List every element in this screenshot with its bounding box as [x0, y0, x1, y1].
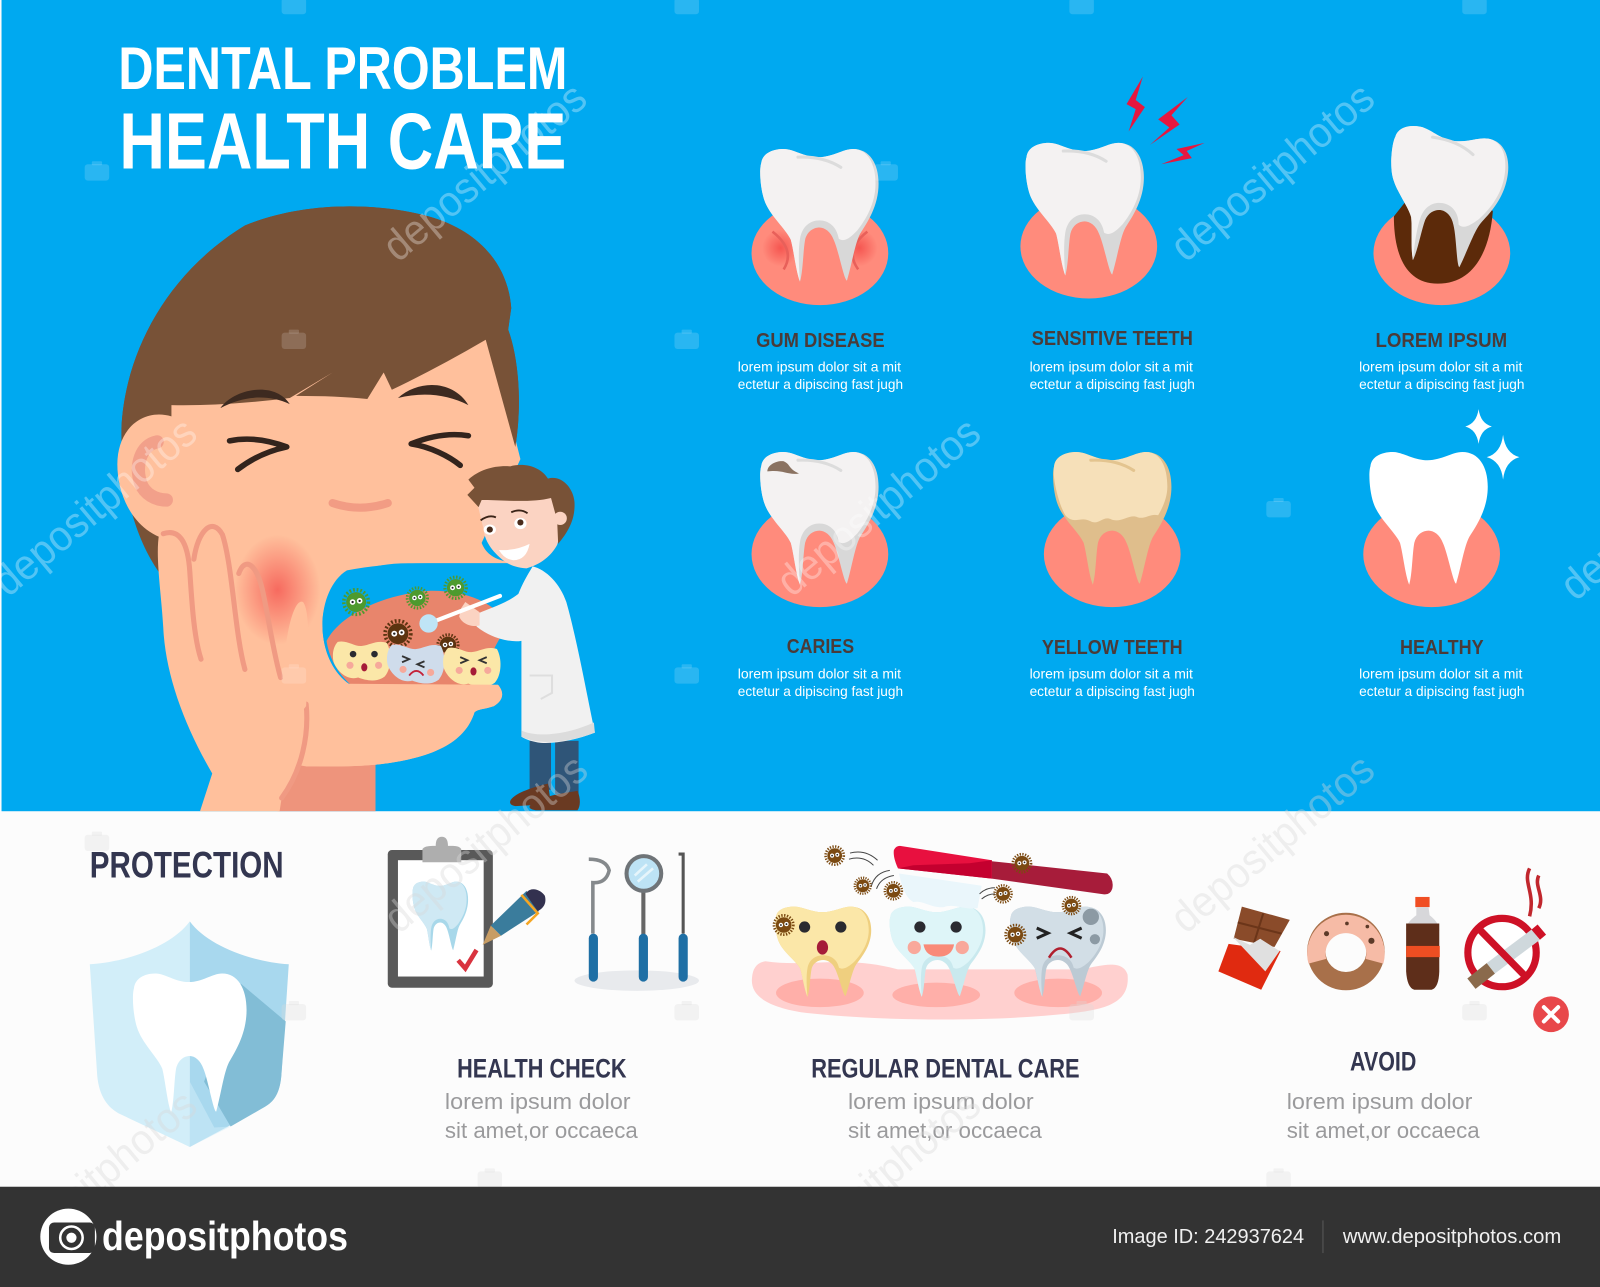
cigarette [1471, 930, 1542, 984]
text: regular dental care description: sit amet,or occaeca [848, 1118, 1042, 1143]
watermark text: depositphotos [767, 408, 990, 606]
text: health check description: lorem ipsum dolor [445, 1089, 631, 1114]
illustration: dentist [419, 465, 595, 810]
description: ectetur a dipiscing fast jugh [738, 684, 903, 700]
patient hair front [121, 206, 519, 447]
condition: caries [738, 452, 903, 700]
icon: donut [1316, 922, 1376, 981]
text: health check description: sit amet,or occaeca [445, 1118, 638, 1143]
patient hair back [121, 206, 519, 572]
description: ectetur a dipiscing fast jugh [1030, 377, 1195, 393]
title: HEALTH CARE [119, 96, 566, 185]
germs [774, 847, 1080, 944]
dentist eyes and brows [481, 510, 528, 535]
tools: probe [679, 854, 688, 982]
dentist smile [499, 544, 530, 560]
text: health check description [445, 1089, 638, 1143]
icon: chocolate [1218, 907, 1290, 990]
title: DENTAL PROBLEM [118, 35, 567, 102]
mouth interior [322, 563, 527, 686]
watermark text: depositphotos [1161, 745, 1384, 942]
toothbrush bristles [899, 873, 982, 909]
condition: yellow teeth [1030, 452, 1195, 700]
hand on cheek [158, 522, 309, 811]
description [738, 667, 903, 700]
tooth [760, 149, 879, 282]
mouth tooth characters [333, 641, 501, 687]
patient mouth line [333, 503, 388, 508]
description [738, 359, 903, 393]
text: avoid description: lorem ipsum dolor [1287, 1089, 1473, 1114]
dentist coat [477, 566, 595, 743]
icon: dental tools [574, 854, 699, 991]
dentist hand and probe [419, 596, 500, 633]
icon: no smoking [1468, 868, 1542, 987]
text: regular dental care description [848, 1089, 1042, 1143]
tooth [760, 452, 879, 585]
icon: shield with tooth [90, 921, 289, 1147]
description: lorem ipsum dolor sit a mit [1030, 359, 1193, 375]
title [118, 35, 567, 185]
toothache glow [235, 535, 320, 645]
watermark text: depositphotos [374, 73, 596, 271]
heading: avoid: AVOID [1350, 1046, 1416, 1076]
decay [1394, 192, 1493, 284]
description [1359, 667, 1524, 700]
condition: sensitive teeth [1020, 77, 1205, 393]
inflammation glow [762, 230, 878, 269]
watermark text: depositphotos [375, 745, 597, 942]
patient closed eyes [230, 435, 468, 469]
yellow tooth [775, 907, 871, 997]
description [1359, 359, 1524, 393]
description [1030, 667, 1195, 700]
dentist shoes and trousers [510, 741, 580, 810]
text: avoid description [1287, 1089, 1480, 1143]
coat shading and pocket [521, 676, 595, 742]
text: avoid description: sit amet,or occaeca [1287, 1118, 1480, 1143]
heading: LOREM IPSUM [1376, 330, 1507, 352]
last finger [283, 602, 308, 719]
dentist ear [554, 512, 567, 525]
dentist hair [467, 465, 575, 544]
heading: GUM DISEASE [756, 330, 885, 352]
icon: soda bottle [1406, 897, 1440, 990]
neck [278, 745, 376, 811]
description: ectetur a dipiscing fast jugh [1030, 684, 1195, 700]
tooth [1026, 143, 1144, 276]
heading: YELLOW TEETH [1042, 637, 1183, 659]
footer image id and website: www.depositphotos.com [1342, 1226, 1561, 1248]
motion lines [849, 852, 995, 899]
condition: lorem ipsum (decay) [1359, 123, 1524, 393]
gum [327, 591, 508, 686]
tooth [1374, 123, 1513, 274]
heading: regular dental care: REGULAR DENTAL CARE [811, 1054, 1080, 1084]
icon: x mark [1533, 996, 1569, 1032]
toothbrush [894, 846, 1113, 894]
icon: sparkles [1465, 409, 1519, 480]
inner gums [776, 979, 1102, 1007]
patient face [159, 332, 527, 766]
icon: clipboard [388, 837, 493, 988]
description [1030, 359, 1195, 393]
heading: HEALTHY [1400, 637, 1484, 659]
description: lorem ipsum dolor sit a mit [738, 667, 901, 683]
description: ectetur a dipiscing fast jugh [1359, 377, 1524, 393]
icon: pencil [483, 889, 545, 945]
cavity [767, 461, 799, 474]
icon: pain lightning bolts [1127, 77, 1205, 164]
gum band [752, 961, 1128, 1019]
dentist head [477, 492, 564, 568]
tools: mirror [627, 856, 661, 982]
heading: protection: PROTECTION [90, 845, 284, 886]
patient ear [117, 415, 194, 541]
illustration: patient with toothache [117, 206, 527, 811]
patient brows [220, 385, 468, 408]
heading: health check: HEALTH CHECK [457, 1054, 627, 1084]
tooth [1053, 452, 1171, 585]
description: lorem ipsum dolor sit a mit [1359, 667, 1522, 683]
gray tooth [1010, 907, 1106, 997]
description: ectetur a dipiscing fast jugh [1359, 684, 1524, 700]
text: regular dental care description: lorem ipsum dolor [848, 1089, 1034, 1114]
description: lorem ipsum dolor sit a mit [1030, 667, 1193, 683]
smoke [1527, 868, 1541, 916]
footer bar [0, 1187, 1600, 1287]
watermark text: depositphotos [767, 1081, 990, 1278]
germs in mouth [344, 577, 466, 655]
hand finger lines [163, 526, 307, 798]
footer logo: depositphotos [102, 1213, 348, 1259]
tools: hook [589, 859, 609, 982]
heading: CARIES [787, 636, 854, 658]
condition: healthy [1359, 409, 1524, 700]
heading: SENSITIVE TEETH [1032, 328, 1193, 350]
footer logo [40, 1209, 348, 1265]
description: ectetur a dipiscing fast jugh [738, 377, 903, 393]
footer image id and website [1112, 1220, 1561, 1253]
blue tooth [890, 907, 986, 997]
footer image id and website: Image ID: 242937624 [1112, 1226, 1304, 1248]
illustration: brushing teeth [752, 846, 1128, 1019]
description: lorem ipsum dolor sit a mit [1359, 359, 1522, 375]
lower lip [301, 684, 502, 766]
description: lorem ipsum dolor sit a mit [738, 359, 901, 375]
watermark text: depositphotos [1161, 73, 1384, 271]
condition: gum disease [738, 149, 903, 393]
tooth [1369, 452, 1488, 585]
